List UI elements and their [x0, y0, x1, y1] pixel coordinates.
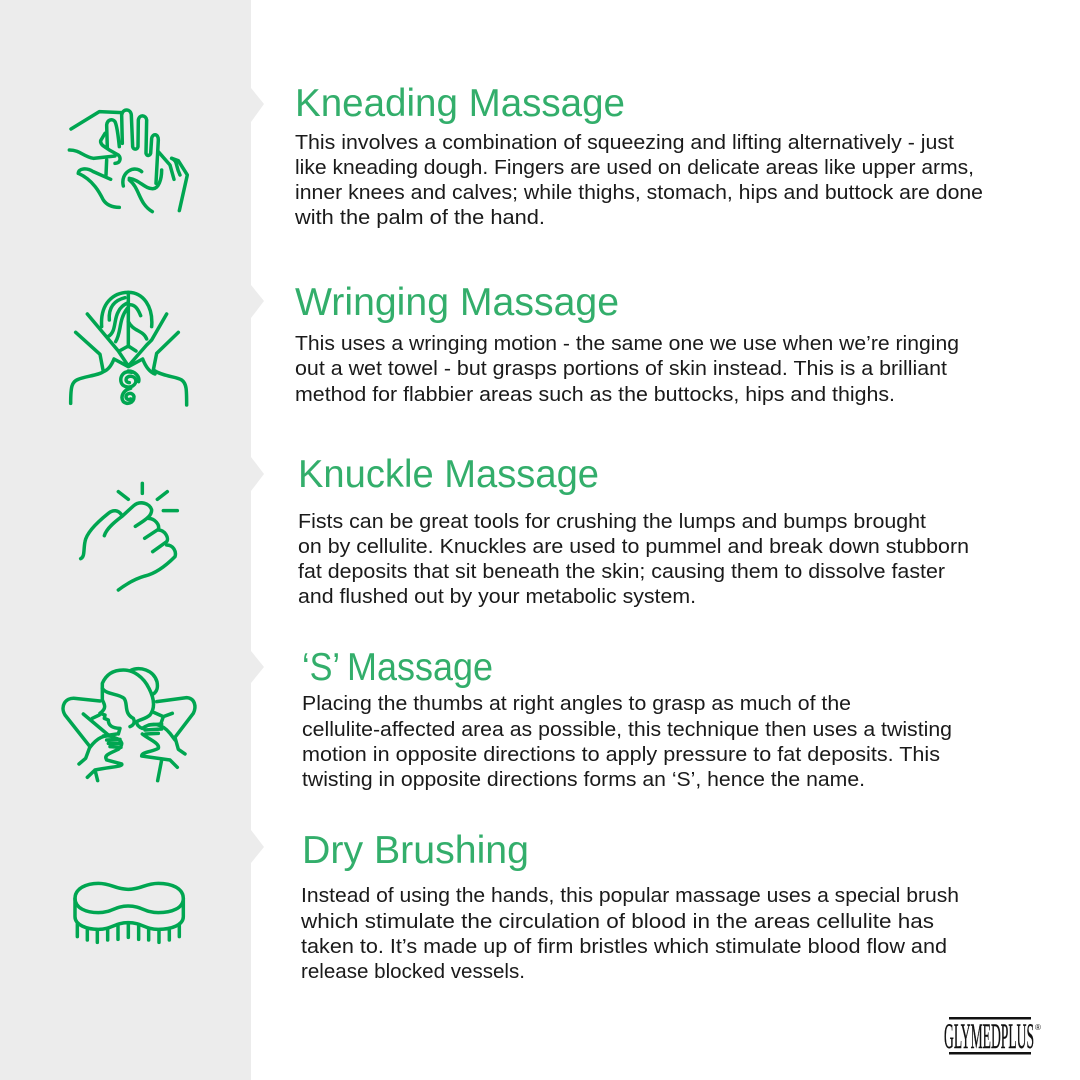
text block: S Massage description: cellulite-affected area as possible, this technique then uses a twisting	[302, 718, 952, 741]
heading: Wringing Massage: Wringing Massage	[295, 281, 619, 324]
text block: Knuckle description: fat deposits that sit beneath the skin; causing them to dissolve faster	[298, 560, 945, 583]
text block: Dry Brushing description: release blocked vessels.	[301, 960, 525, 983]
left sidebar panel with notches	[0, 0, 264, 1080]
logo: GlyMed Plus: ®	[1035, 1023, 1041, 1032]
text block: Knuckle description: Fists can be great tools for crushing the lumps and bumps brought	[298, 510, 926, 533]
text block: Dry Brushing description: Instead of using the hands, this popular massage uses a special brush	[301, 884, 959, 907]
text block: S Massage description: Placing the thumbs at right angles to grasp as much of the	[302, 692, 851, 715]
icon: wringing neck massage	[71, 292, 187, 405]
text block: Dry Brushing description: which stimulate the circulation of blood in the areas cellulite has	[300, 910, 934, 933]
icon: kneading hands	[69, 110, 187, 212]
text block: Kneading description: with the palm of the hand.	[294, 206, 545, 229]
heading: Dry Brushing: Dry Brushing	[302, 829, 529, 872]
text block: Knuckle description: and flushed out by your metabolic system.	[298, 585, 696, 608]
text block: S Massage description: motion in opposite directions to apply pressure to fat deposits. This	[302, 743, 940, 766]
text block: Kneading description: like kneading dough. Fingers are used on delicate areas like upper arms,	[295, 156, 974, 179]
text block: Wringing description: out a wet towel - but grasps portions of skin instead. This is a brilliant	[295, 357, 947, 380]
heading: S Massage: Massage	[347, 646, 493, 689]
icon: dry brush	[75, 883, 183, 942]
text block: S Massage description: twisting in opposite directions forms an ‘S’, hence the name.	[302, 768, 865, 791]
text block: Dry Brushing description: taken to. It’s made up of firm bristles which stimulate blood flow and	[301, 935, 947, 958]
text block: Wringing description: method for flabbier areas such as the buttocks, hips and thighs.	[295, 383, 895, 406]
text block: Kneading description: This involves a combination of squeezing and lifting alternatively - just	[295, 131, 954, 154]
icon: knuckle fist	[81, 483, 177, 590]
heading: Kneading Massage: Kneading Massage	[295, 82, 625, 125]
text block: S Massage description	[302, 692, 952, 791]
heading: Knuckle Massage: Knuckle Massage	[298, 453, 599, 496]
text block: Wringing description: This uses a wringing motion - the same one we use when we’re ringing	[295, 332, 959, 355]
text block: Knuckle description: on by cellulite. Knuckles are used to pummel and break down stubborn	[298, 535, 969, 558]
text block: Dry Brushing description	[300, 884, 959, 983]
icon: S massage figure	[63, 669, 195, 781]
text block: Kneading description	[294, 131, 983, 229]
text block: Wringing description	[295, 332, 959, 406]
text block: Kneading description: inner knees and calves; while thighs, stomach, hips and buttock are done	[295, 181, 983, 204]
text block: Knuckle description	[298, 510, 969, 608]
heading: S Massage: ‘S’	[302, 646, 340, 689]
